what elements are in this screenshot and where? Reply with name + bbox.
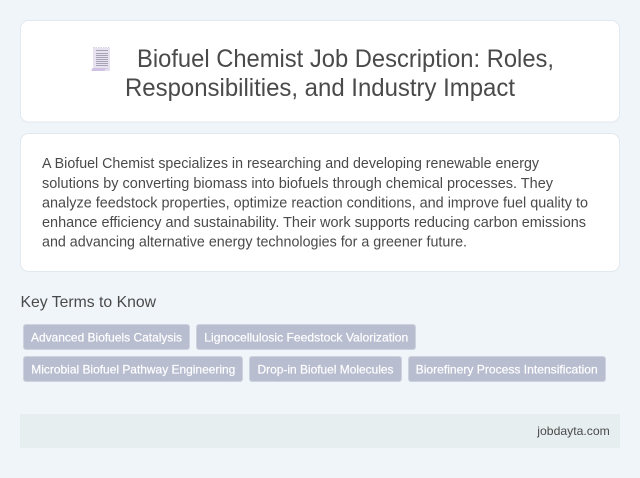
footer bar — [20, 414, 620, 448]
title: Biofuel Chemist Job Description: Roles, — [137, 45, 554, 73]
tag: biorefinery process intensification: Biorefinery Process Intensification — [416, 362, 598, 376]
panel: description card — [20, 134, 620, 272]
footer bar: jobdayta.com — [536, 424, 610, 438]
tag: drop-in biofuel molecules — [250, 356, 402, 382]
tag: microbial biofuel pathway engineering — [24, 356, 242, 382]
description text: A Biofuel Chemist specializes in researching and developing renewable energy — [42, 156, 540, 172]
panel: title card — [20, 20, 620, 122]
description text: analyze feedstock properties, optimize reaction conditions, and improve fuel quality to — [42, 196, 588, 212]
tag: advanced biofuels catalysis: Advanced Biofuels Catalysis — [31, 330, 182, 344]
tag: drop-in biofuel molecules: Drop-in Biofuel Molecules — [258, 362, 394, 376]
tag: advanced biofuels catalysis — [24, 324, 190, 350]
title: Responsibilities, and Industry Impact — [125, 74, 515, 102]
icon: document scroll — [92, 48, 110, 71]
description text — [42, 156, 588, 250]
tag: biorefinery process intensification — [408, 356, 606, 382]
description text: enhance efficiency and sustainability. Their work supports reducing carbon emissions — [42, 215, 586, 231]
description text: and advancing alternative energy technologies for a greener future. — [42, 234, 467, 250]
heading: key terms: Key Terms to Know — [20, 294, 156, 311]
tag: lignocellulosic feedstock valorization — [196, 324, 416, 350]
title — [125, 45, 554, 102]
tag: lignocellulosic feedstock valorization: Lignocellulosic Feedstock Valorization — [204, 330, 408, 344]
tag: microbial biofuel pathway engineering: Microbial Biofuel Pathway Engineering — [31, 362, 235, 376]
description text: solutions by converting biomass into biofuels through chemical processes. They — [42, 176, 554, 192]
